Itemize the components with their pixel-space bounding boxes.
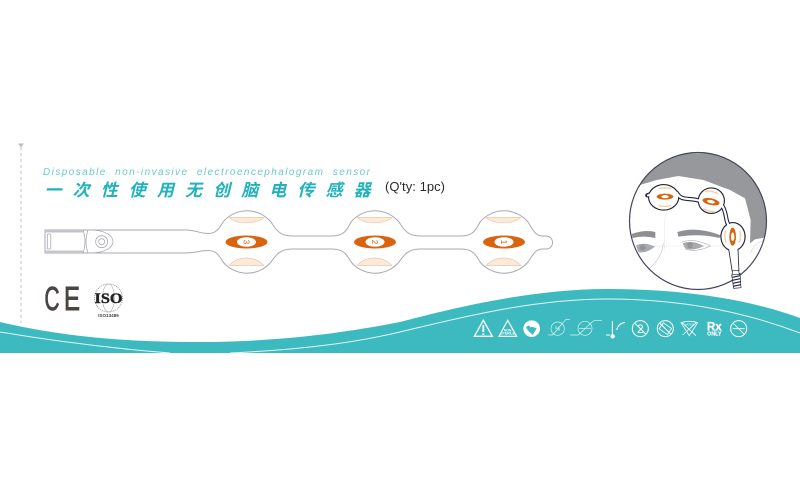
CE mark: E: [64, 280, 80, 317]
quantity label: (Q'ty: 1pc): [385, 179, 445, 194]
sensor on face: [647, 184, 746, 288]
icon: no needle: [731, 321, 747, 337]
icon: humidity limit: [548, 319, 570, 335]
icon: pressure limit: [570, 321, 602, 335]
electrode 1: [483, 218, 525, 266]
regulatory symbols: [474, 319, 747, 338]
connector: [45, 230, 113, 253]
sensor outline: [647, 184, 746, 271]
CE mark: C: [44, 280, 60, 317]
ISO 13485 badge: ISO13485: [98, 313, 119, 318]
connector tail: [732, 273, 741, 288]
eyebrows and eyes: [632, 230, 721, 252]
icon: non-sterile warning: [499, 320, 517, 336]
ISO 13485 badge: [94, 284, 122, 318]
icon: no latex: LATEX: [685, 322, 694, 326]
electrode 2: 2: [370, 240, 379, 245]
electrode 3: [226, 218, 268, 266]
icon: prescription only: Rx: [707, 320, 722, 333]
electrode 1: 1: [499, 240, 508, 245]
icon: do not reuse: [632, 321, 648, 337]
sensor body: [648, 185, 744, 271]
infographic canvas: [0, 144, 800, 354]
application illustration: [630, 152, 770, 290]
icon: no latex: [681, 321, 698, 336]
hair: [640, 153, 770, 243]
electrode 3: 3: [242, 240, 250, 245]
icon: consult manual: [523, 320, 540, 337]
icon: caution: [474, 320, 492, 336]
icon: prescription only: ONLY: [707, 331, 722, 337]
icon: do not use if damaged: [657, 321, 673, 337]
teal wave banner: [0, 289, 800, 353]
CE mark: [44, 280, 80, 317]
strip outline: [45, 211, 552, 273]
icon: non-sterile warning: STERILE: [501, 332, 515, 336]
face guide lines: [633, 177, 762, 269]
title: English: Disposable non-invasive electroencephalogram sensor: [43, 167, 371, 178]
icon: non-sterile warning: NON: [504, 328, 512, 332]
icon: temperature limit: [606, 321, 625, 338]
icon: humidity limit: %: [555, 327, 560, 333]
sensor strip: [45, 211, 552, 273]
icon: do not reuse: 2: [637, 322, 644, 336]
title: Chinese: 一次性使用无创脑电传感器: [44, 181, 382, 200]
ISO 13485 badge: ISO: [94, 291, 122, 307]
electrode 2: [354, 218, 396, 266]
